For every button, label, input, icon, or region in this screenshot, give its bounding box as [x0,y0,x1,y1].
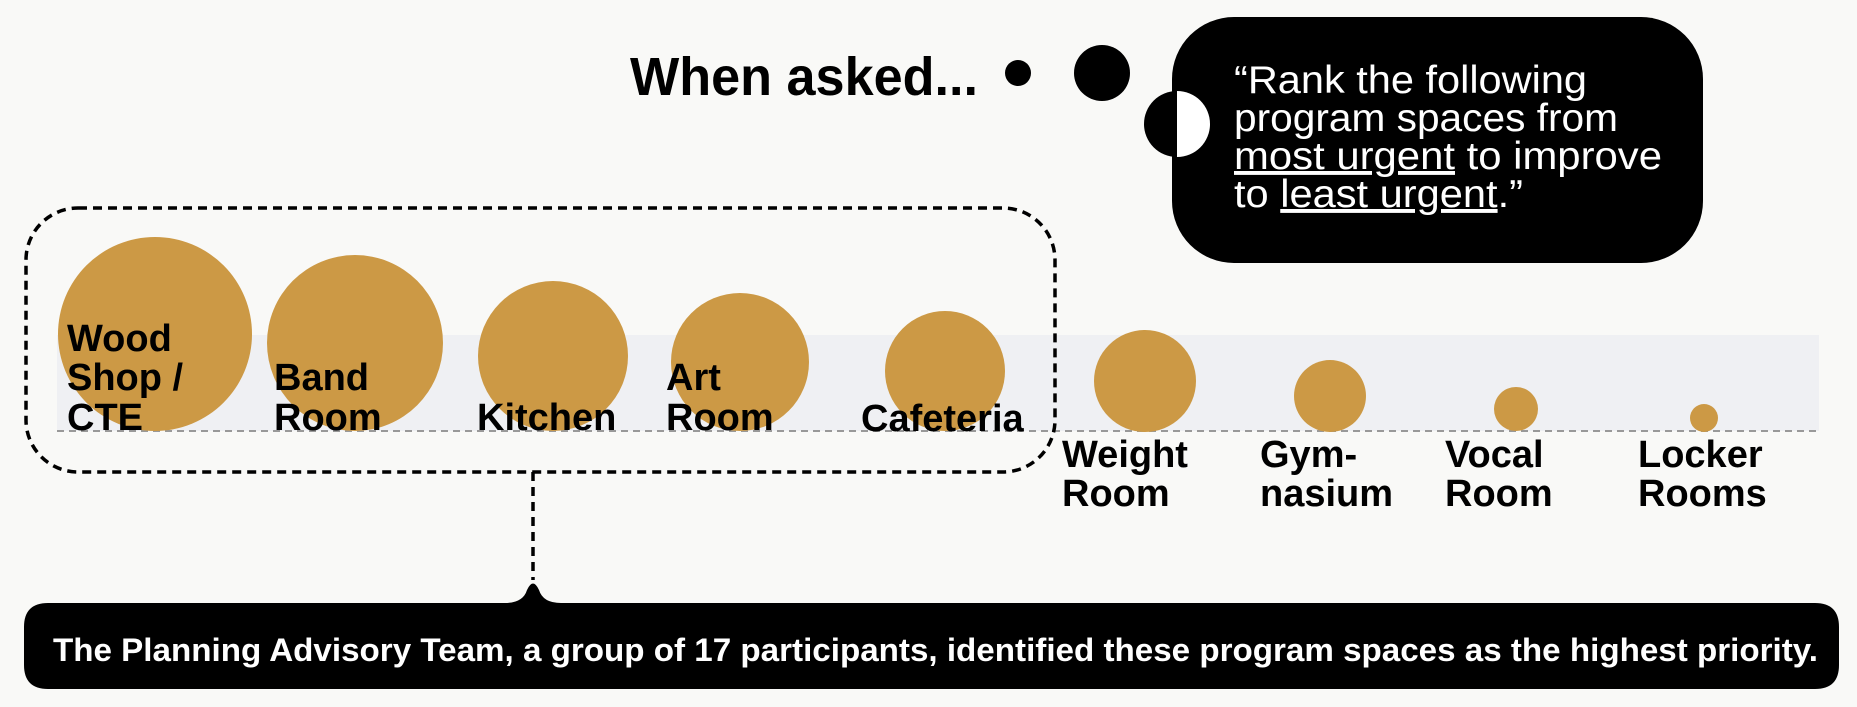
bubble quote text: to least urgent .” [1234,173,1523,216]
labels: Band [274,357,369,399]
labels: Art [666,357,721,399]
labels: Shop / [67,357,184,399]
icon: large thought dot [1144,91,1210,157]
labels: Wood [67,318,172,360]
speech bubble [1172,17,1703,263]
labels: Vocal [1445,434,1544,476]
labels: nasium [1260,473,1393,515]
grey band [57,335,1819,431]
labels: Room [274,397,382,439]
bubble quote text: “Rank the following [1234,59,1587,102]
labels: Room [1445,473,1553,515]
connector dashed line [531,472,535,580]
labels: Room [666,397,774,439]
labels: Kitchen [477,397,616,439]
labels [67,318,1767,515]
labels: Rooms [1638,473,1767,515]
bottom callout bar [24,584,1839,689]
labels: Room [1062,473,1170,515]
circles [58,237,1718,432]
labels: CTE [67,397,143,439]
labels: Cafeteria [861,398,1024,440]
labels: Locker [1638,434,1763,476]
bubble quote text: most urgent to improve [1234,135,1662,178]
callout text: The Planning Advisory Team, a group of 17 participants, identified these program spaces as the highest priority. [53,632,1818,668]
title: When asked: When asked... [630,47,978,107]
labels: Gym- [1260,434,1357,476]
bubble quote text: program spaces from [1234,97,1618,140]
labels: Weight [1062,434,1188,476]
icon: medium thought dot [1074,45,1130,101]
icon: small thought dot [1005,60,1031,86]
dashed grouping box [26,208,1055,472]
bubble quote text [1234,59,1662,216]
